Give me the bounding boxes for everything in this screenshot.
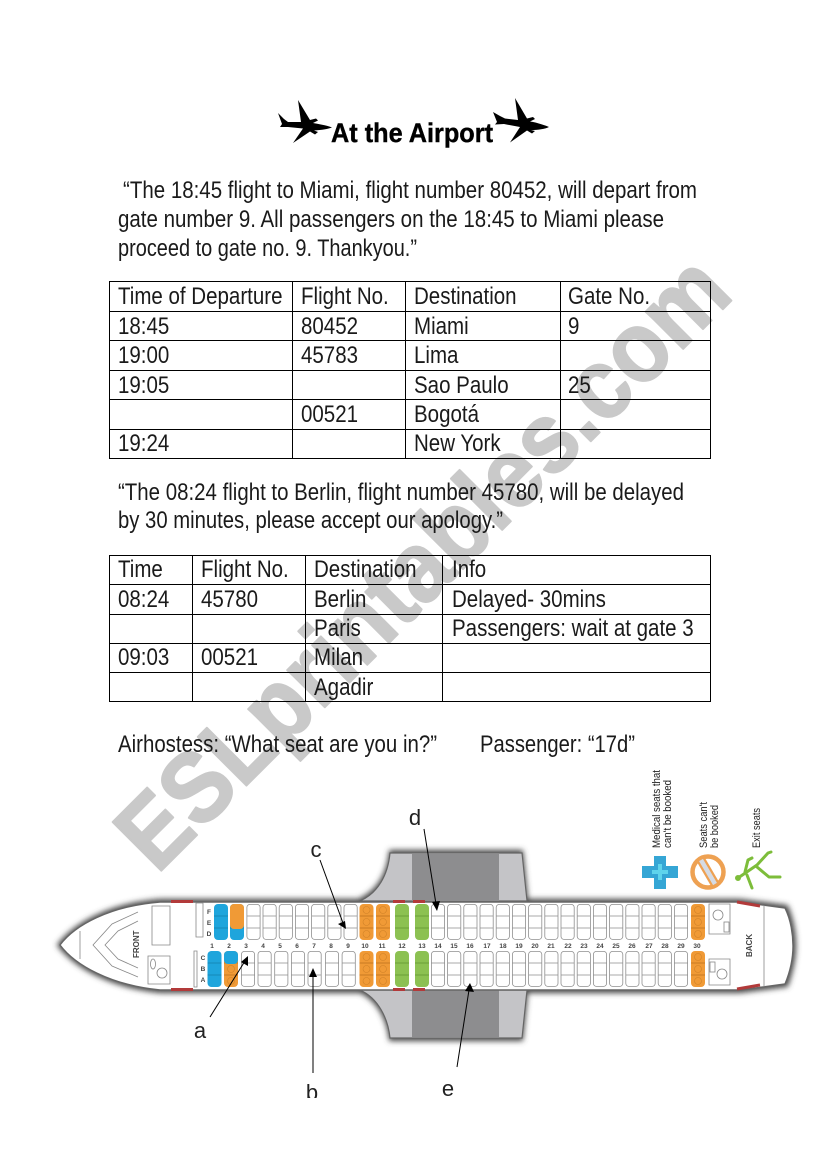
cockpit and front galley (80, 903, 203, 987)
departures table: 25 (568, 372, 591, 398)
delays table: Time (118, 556, 163, 582)
delays table: Paris (314, 615, 361, 641)
delays table: Passengers: wait at gate 3 (452, 615, 694, 641)
seat letters and row numbers: B (201, 966, 206, 973)
departures table: Sao Paulo (414, 372, 509, 398)
delays table: 00521 (201, 644, 258, 670)
seat letters and row numbers: 22 (564, 943, 572, 950)
seat letters and row numbers: 7 (312, 943, 316, 950)
icon: running figure (736, 852, 780, 888)
announcement paragraph 1: “The 18:45 flight to Miami, flight number 80452, will depart from (123, 177, 697, 204)
seat letters and row numbers: 21 (547, 943, 555, 950)
callout a: a (194, 1018, 207, 1043)
announcement paragraph 1: gate number 9. All passengers on the 18:45 to Miami please (118, 206, 664, 233)
departures table: Flight No. (301, 283, 389, 309)
seat letters and row numbers (201, 909, 701, 984)
departures table: Miami (414, 313, 469, 339)
seat letters and row numbers: 16 (466, 943, 474, 950)
seat letters and row numbers: 10 (361, 943, 369, 950)
fuselage (60, 902, 793, 990)
seat letters and row numbers: 5 (278, 943, 282, 950)
seat letters and row numbers: A (201, 977, 206, 984)
seat letters and row numbers: 8 (329, 943, 333, 950)
delays table: 08:24 (118, 586, 169, 612)
rear lavatories (709, 904, 764, 987)
departures table: 19:24 (118, 430, 169, 456)
departures table: Gate No. (568, 283, 650, 309)
seat letters and row numbers: 28 (661, 943, 669, 950)
departures table (110, 282, 710, 458)
seat letters and row numbers: 27 (645, 943, 653, 950)
seat letters and row numbers: 9 (346, 943, 350, 950)
seat letters and row numbers: 6 (295, 943, 299, 950)
delays table: Flight No. (201, 556, 289, 582)
heading text: At the Airport (331, 118, 493, 148)
legend: medical seats: Medical seats that (651, 770, 663, 848)
announcement paragraph 1: proceed to gate no. 9. Thankyou.” (118, 235, 417, 262)
seat letters and row numbers: 26 (628, 943, 636, 950)
seat letters and row numbers: 19 (515, 943, 523, 950)
announcement paragraph 2 (118, 479, 684, 534)
label: front: FRONT (132, 930, 141, 958)
callout b: b (306, 1080, 318, 1105)
callout e (442, 983, 474, 1101)
announcement paragraph 1 (118, 177, 697, 262)
seat letters and row numbers: 2 (227, 943, 231, 950)
delays table: Destination (314, 556, 417, 582)
seat letters and row numbers: 25 (612, 943, 620, 950)
legend: exit seats: Exit seats (751, 808, 763, 848)
seats: upper block D-F (214, 904, 705, 940)
departures table: Bogotá (414, 401, 480, 427)
dialogue line: Passenger: “17d” (480, 731, 635, 758)
departures table: Destination (414, 283, 517, 309)
door markers (171, 902, 760, 990)
departures table: 00521 (301, 401, 358, 427)
seat letters and row numbers: E (207, 920, 212, 927)
label: back: BACK (745, 934, 754, 957)
icon: left airplane (278, 100, 332, 143)
legend: seats can't be booked: Seats can't (698, 802, 710, 848)
callout e: e (442, 1076, 454, 1101)
callout b (300, 968, 330, 1106)
seat letters and row numbers: 11 (379, 943, 386, 950)
legend: medical seats (642, 770, 678, 889)
announcement paragraph 2: “The 08:24 flight to Berlin, flight number 45780, will be delayed (118, 479, 684, 506)
seat letters and row numbers: 4 (261, 943, 265, 950)
seat letters and row numbers: 1 (210, 943, 214, 950)
delays table: Berlin (314, 586, 366, 612)
delays table: Agadir (314, 674, 374, 700)
delays table: Info (452, 556, 486, 582)
departures table: 19:00 (118, 342, 169, 368)
departures table: 9 (568, 313, 579, 339)
delays table: 45780 (201, 586, 258, 612)
watermark: ESLprintables.com (93, 233, 751, 891)
legend: seats can't be booked: be booked (709, 805, 721, 848)
seat letters and row numbers: 17 (483, 943, 491, 950)
seat letters and row numbers: D (207, 931, 212, 938)
callout d (409, 805, 440, 911)
seats: lower block A-C (208, 951, 705, 987)
legend: exit seats (736, 808, 780, 888)
seat letters and row numbers: F (207, 909, 211, 916)
departures table: 80452 (301, 313, 358, 339)
seat letters and row numbers: 24 (596, 943, 604, 950)
seat letters and row numbers: 30 (693, 943, 701, 950)
icon: no-entry circle (692, 856, 724, 888)
legend: seats can't be booked (692, 802, 724, 888)
departures table: New York (414, 430, 501, 456)
legend: medical seats: can't be booked (662, 780, 674, 848)
seat callouts (194, 805, 474, 1106)
departures table: Time of Departure (118, 283, 282, 309)
delays table: Milan (314, 644, 363, 670)
seat letters and row numbers: 29 (677, 943, 685, 950)
delays table (110, 556, 710, 702)
seat letters and row numbers: 18 (499, 943, 507, 950)
departures table: 45783 (301, 342, 358, 368)
icon: right airplane (493, 98, 549, 142)
announcement paragraph 2: by 30 minutes, please accept our apology.” (118, 507, 503, 534)
delays table: 09:03 (118, 644, 169, 670)
seat letters and row numbers: 23 (580, 943, 588, 950)
departures table: Lima (414, 342, 459, 368)
seat letters and row numbers: 14 (434, 943, 442, 950)
seat map: airplane (58, 851, 795, 1040)
callout c: c (310, 837, 322, 862)
title (278, 98, 549, 148)
seat letters and row numbers: 3 (244, 943, 248, 950)
callout d: d (409, 805, 421, 830)
callout a (194, 956, 248, 1043)
seat letters and row numbers: 20 (531, 943, 539, 950)
seat letters and row numbers: 13 (418, 943, 426, 950)
seat letters and row numbers: 15 (450, 943, 458, 950)
delays table: Delayed- 30mins (452, 586, 606, 612)
wings (360, 853, 527, 1038)
callout c (310, 837, 346, 929)
departures table: 18:45 (118, 313, 169, 339)
icon: blue cross (642, 856, 678, 889)
seat letters and row numbers: 12 (398, 943, 406, 950)
departures table: 19:05 (118, 372, 169, 398)
seat letters and row numbers: C (201, 955, 206, 962)
dialogue line: Airhostess: “What seat are you in?” (118, 731, 437, 758)
